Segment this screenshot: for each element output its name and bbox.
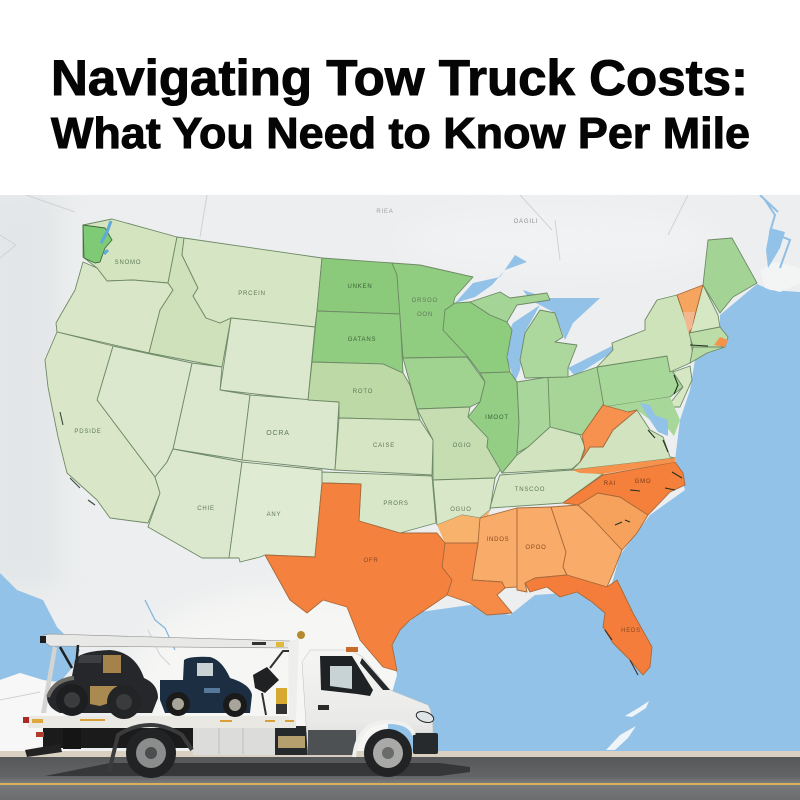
rear wheel (109, 725, 192, 778)
state labels: PRCEIN (238, 291, 266, 297)
state labels: SNOMO (115, 260, 141, 266)
truck frame and chassis (25, 725, 308, 757)
coastal detail (60, 345, 708, 675)
region: upper south states (322, 410, 675, 533)
front bumper (413, 733, 438, 754)
state labels: GMO (635, 479, 651, 485)
state labels: OPOO (525, 545, 547, 551)
front wheel (354, 722, 414, 777)
state labels (74, 260, 651, 634)
state labels: UNKEN (347, 284, 373, 290)
map background: RIEA (376, 209, 394, 215)
region: southern orange states (265, 285, 728, 675)
state labels: OON (417, 312, 433, 318)
state labels: RAI (604, 481, 616, 487)
state labels: ROTO (353, 389, 373, 395)
state labels: CAISE (373, 443, 395, 449)
state labels: ANY (267, 512, 281, 518)
state labels: OFR (363, 558, 379, 564)
cab lower band (308, 730, 356, 755)
state labels: PDSIDE (74, 429, 102, 435)
side window (320, 656, 373, 696)
road (0, 751, 800, 800)
region: western states (45, 219, 339, 562)
region: plains and midwest states (308, 258, 604, 480)
title: Navigating Tow Truck Costs: (51, 50, 748, 106)
map background (0, 190, 800, 770)
state labels: IMOOT (485, 415, 509, 421)
roof marker light (346, 647, 358, 652)
headlight (415, 709, 435, 725)
map background: OAGILI (514, 219, 538, 225)
state labels: OGIO (453, 443, 471, 449)
state labels: GATANS (348, 337, 376, 343)
black ATV on deck (47, 650, 158, 719)
door handle (318, 705, 329, 710)
blue utility vehicle on deck (160, 657, 252, 717)
puget sound (101, 221, 111, 254)
state labels: TNSCOO (515, 487, 545, 493)
state labels: PRORS (383, 501, 409, 507)
lakes (455, 255, 613, 382)
region: northeast states (597, 238, 757, 436)
map of United States (45, 219, 757, 675)
state labels: INDOS (486, 537, 510, 543)
state labels: DRSOO (412, 298, 438, 304)
chesapeake bay (640, 403, 668, 436)
boom arm (40, 631, 305, 720)
tow truck (23, 631, 438, 778)
flatbed deck (23, 716, 296, 728)
title (51, 50, 750, 158)
truck cab (302, 647, 438, 755)
windshield (360, 658, 390, 690)
state labels: OGUO (450, 507, 472, 513)
state labels: OCRA (266, 430, 290, 437)
washington green patch (83, 225, 112, 263)
state labels: CHIE (197, 506, 215, 512)
bahamas islands (606, 701, 649, 750)
winch equipment (253, 651, 289, 715)
title: What You Need to Know Per Mile (51, 109, 750, 158)
state labels: HEDS (621, 628, 641, 634)
